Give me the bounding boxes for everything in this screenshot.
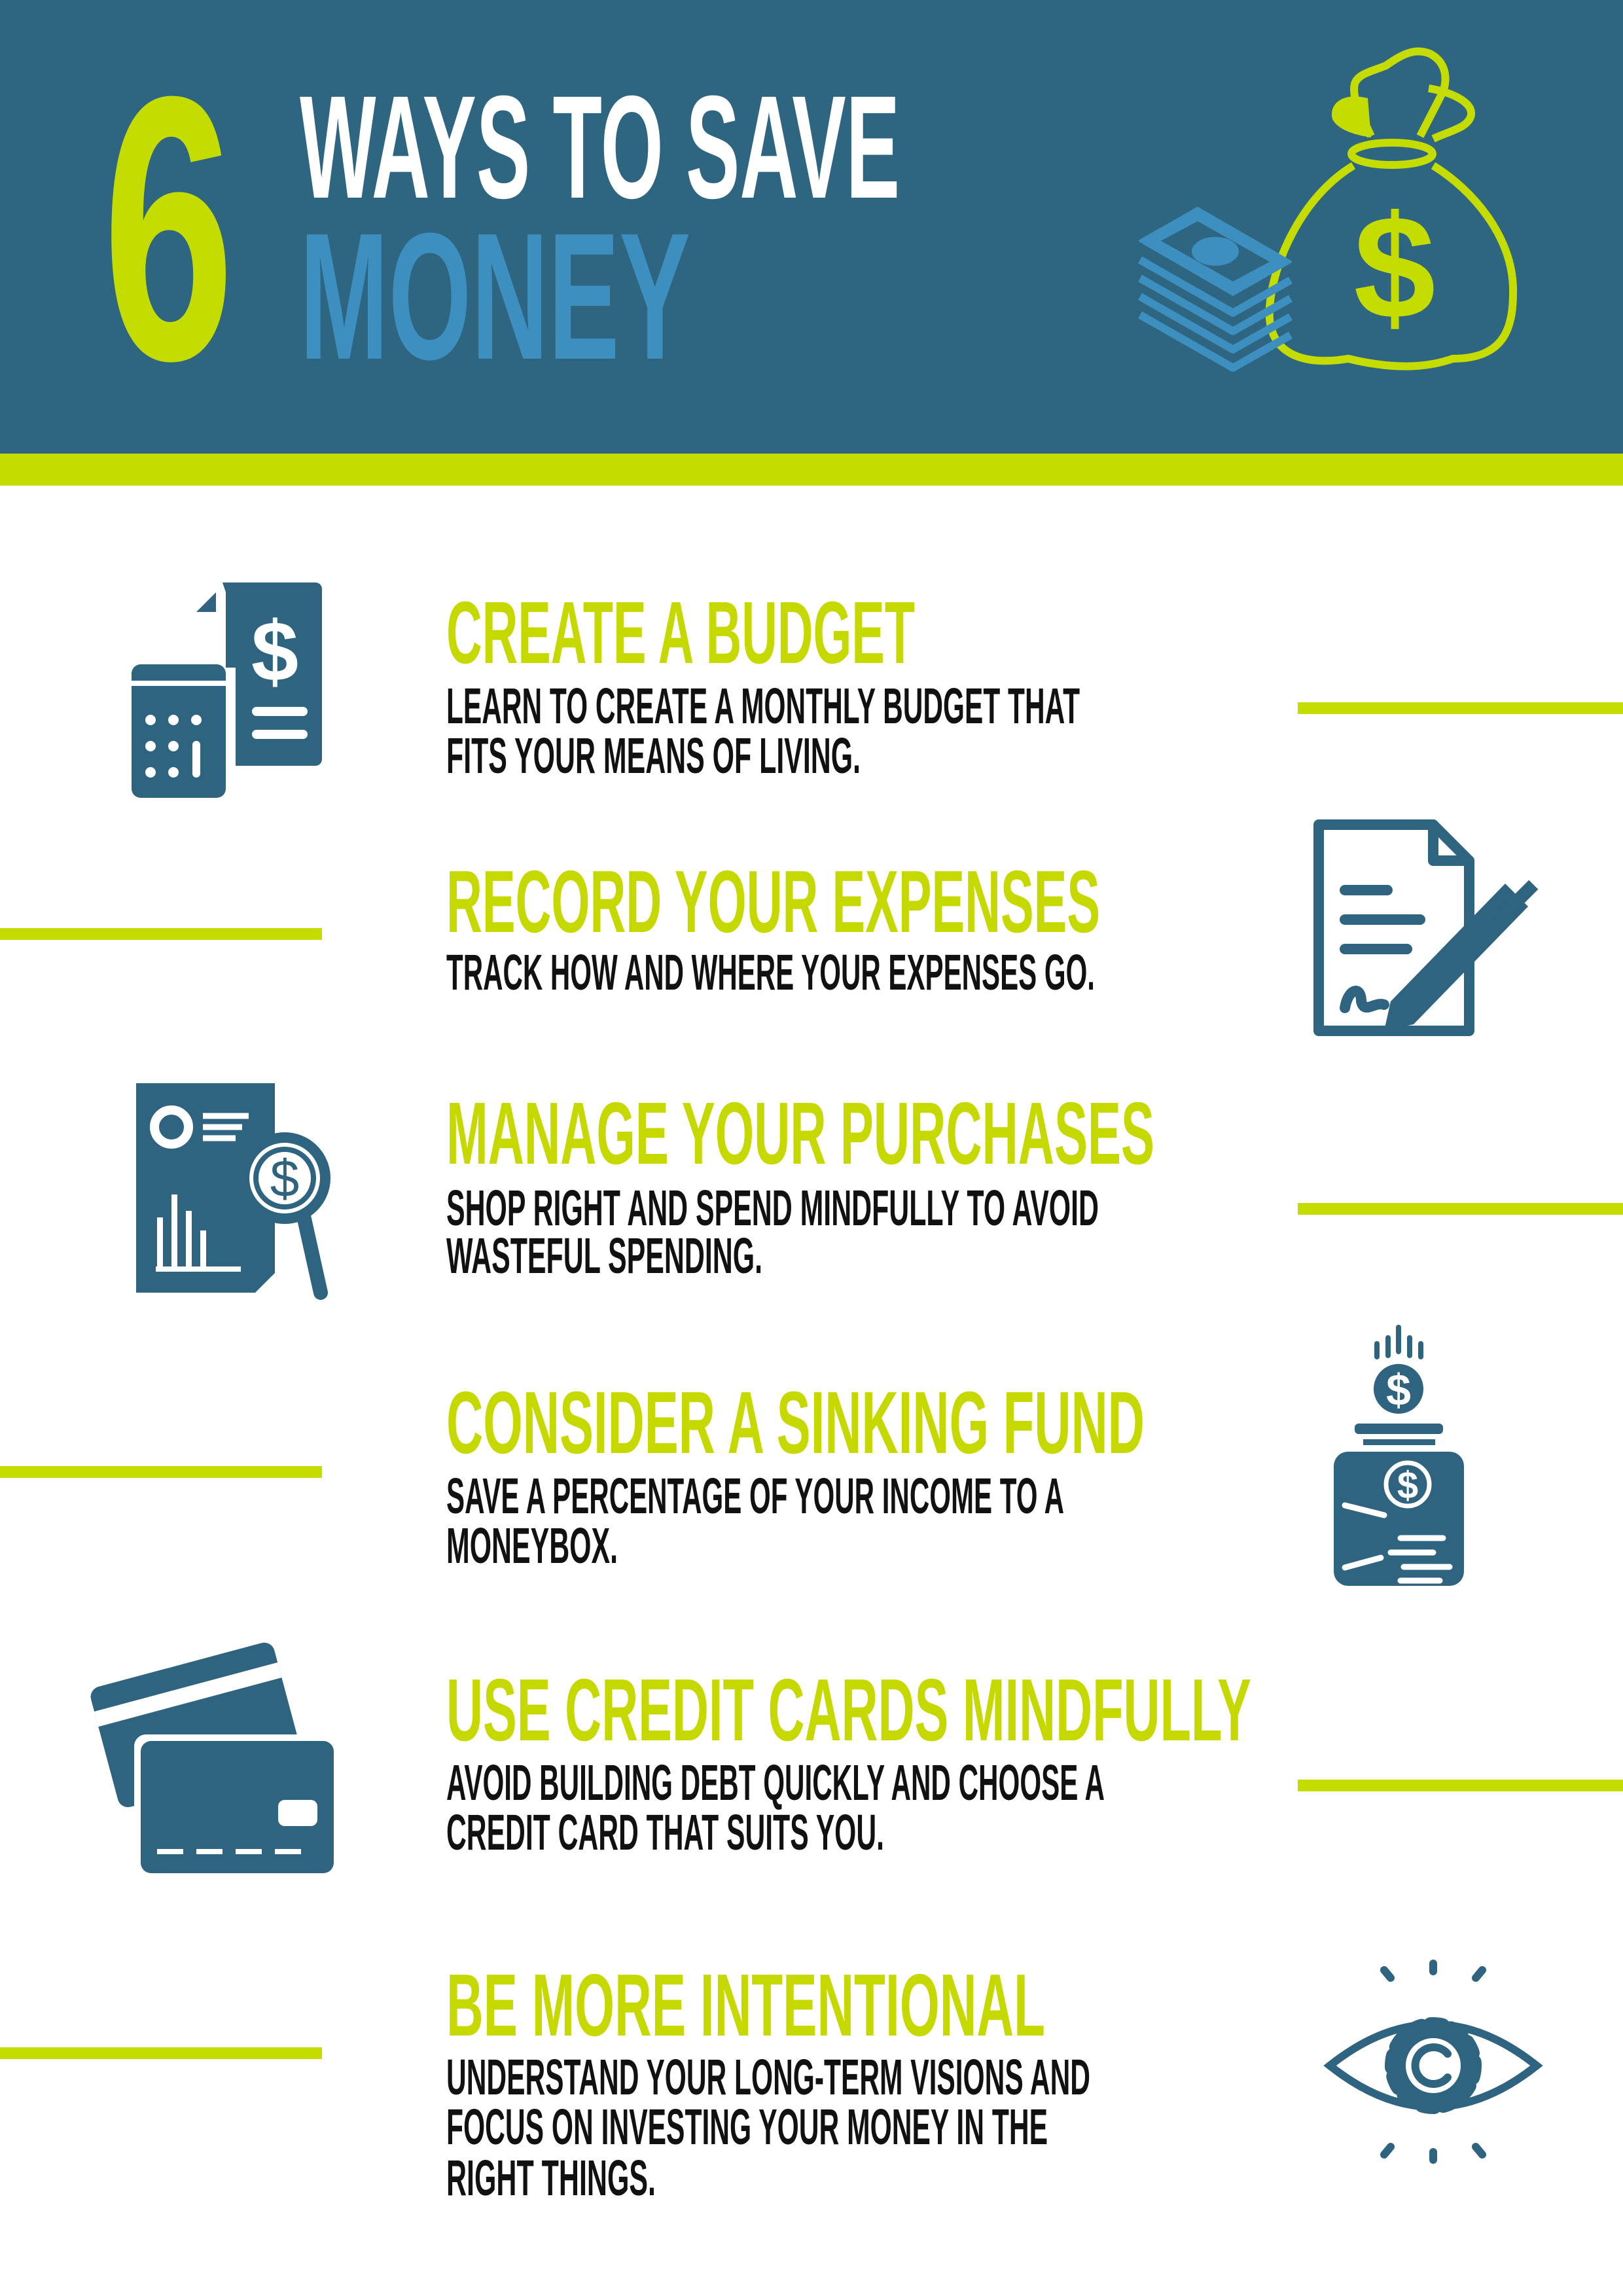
body text: FITS YOUR MEANS OF LIVING. (446, 728, 861, 784)
body text: SAVE A PERCENTAGE OF YOUR INCOME TO A (446, 1468, 1064, 1524)
body text: SHOP RIGHT AND SPEND MINDFULLY TO AVOID (446, 1180, 1099, 1236)
icon: document and pen (1319, 825, 1469, 1031)
step 5: use credit cards mindfully (88, 1640, 1251, 1880)
step 2: record your expenses (446, 825, 1538, 1031)
body text: FOCUS ON INVESTING YOUR MONEY IN THE (446, 2099, 1048, 2155)
heading: CREATE A BUDGET (446, 583, 915, 682)
step 4: consider a sinking fund (446, 1325, 1464, 1586)
title: money: MONEY (300, 196, 690, 397)
body text (446, 2049, 1090, 2206)
icon: money bag and bills: $ (1353, 185, 1436, 350)
body text: MONEYBOX. (446, 1518, 618, 1574)
body text: TRACK HOW AND WHERE YOUR EXPENSES GO. (446, 944, 1095, 1001)
header lime stripe (0, 454, 1623, 486)
icon: moneybox: $ (1397, 1464, 1418, 1507)
icon: eye with gear (1330, 1964, 1537, 2160)
icon: credit cards (88, 1640, 340, 1880)
body text (446, 1180, 1099, 1284)
heading: BE MORE INTENTIONAL (446, 1956, 1045, 2054)
icon: moneybox: $ (1386, 1365, 1411, 1415)
body text (446, 1468, 1064, 1574)
header background (0, 0, 1623, 454)
icon: budget calculator (132, 583, 322, 798)
heading: RECORD YOUR EXPENSES (446, 852, 1100, 951)
body text: CREDIT CARD THAT SUITS YOU. (446, 1804, 884, 1861)
body text (446, 1755, 1105, 1861)
title: ways to save: WAYS TO SAVE (300, 65, 900, 229)
title number 6: 6 (103, 18, 234, 439)
icon: report with magnifier: $ (270, 1149, 299, 1208)
body text: LEARN TO CREATE A MONTHLY BUDGET THAT (446, 678, 1080, 734)
step 1: create a budget (132, 583, 1080, 798)
heading: CONSIDER A SINKING FUND (446, 1373, 1145, 1472)
icon: report with magnifier (136, 1083, 325, 1293)
body text (446, 678, 1080, 784)
body text: RIGHT THINGS. (446, 2150, 656, 2206)
step 3: manage your purchases (136, 1083, 1154, 1293)
icon: money bag and bills (1140, 51, 1513, 368)
step 6: be more intentional (446, 1956, 1537, 2206)
body text: UNDERSTAND YOUR LONG-TERM VISIONS AND (446, 2049, 1090, 2106)
icon: budget calculator: $ (251, 603, 298, 699)
icon: moneybox (1334, 1325, 1464, 1586)
body text: WASTEFUL SPENDING. (446, 1228, 762, 1284)
body text: AVOID BUILDING DEBT QUICKLY AND CHOOSE A (446, 1755, 1105, 1811)
